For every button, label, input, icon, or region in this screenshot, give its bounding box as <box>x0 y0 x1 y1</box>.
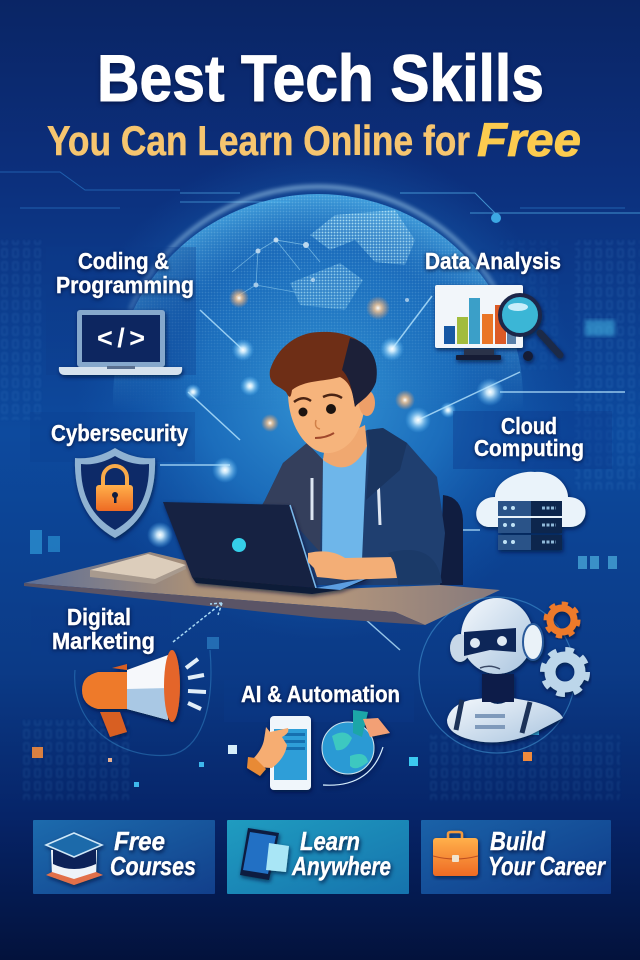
card: learn anywhere: Learn <box>300 826 360 856</box>
panel: ai and automation <box>224 680 414 790</box>
icon: megaphone <box>82 650 180 737</box>
chair <box>440 495 463 585</box>
card: free courses: Courses <box>110 851 196 881</box>
card: free courses: Free <box>114 826 165 856</box>
card: learn anywhere: Anywhere <box>291 851 391 881</box>
head and face <box>288 362 366 453</box>
t-shirt <box>322 445 367 560</box>
title: Free <box>477 113 581 166</box>
arc around megaphone <box>75 650 211 755</box>
panel: robot <box>419 597 587 753</box>
card: free courses <box>33 820 215 894</box>
card: learn anywhere <box>227 820 409 894</box>
network lines and glowing nodes <box>147 288 625 650</box>
title <box>47 41 581 166</box>
panel: coding and programming: Coding & <box>78 248 169 274</box>
icon: phone and tablet <box>240 828 289 880</box>
icon: cloud with server stack <box>476 472 586 550</box>
icon: sound lines <box>186 659 206 709</box>
globe <box>114 182 522 396</box>
panel: cloud computing: Computing <box>474 435 584 461</box>
icon: globe with flags <box>322 710 390 785</box>
icon: orange gear <box>546 604 578 636</box>
neck <box>323 425 367 467</box>
icon: monitor bar chart with magnifier <box>435 285 560 361</box>
panel: ai and automation: AI & Automation <box>241 681 400 707</box>
arrow to laptop <box>173 603 222 642</box>
icon: white gear <box>543 650 587 694</box>
jacket left side <box>262 443 323 552</box>
panel: cybersecurity <box>30 412 195 538</box>
panel: digital marketing <box>31 604 211 755</box>
card: build your career <box>421 820 611 894</box>
panel: cybersecurity: Cybersecurity <box>51 420 188 446</box>
panel: data analysis <box>425 248 561 361</box>
icon: shield with padlock <box>75 448 155 538</box>
panel: cloud computing <box>453 411 612 550</box>
hood collar <box>366 428 407 500</box>
hands and forearm <box>308 550 442 585</box>
icon: graduation cap on books <box>46 833 103 885</box>
panel: digital marketing: Marketing <box>52 628 155 654</box>
panel: data analysis: Data Analysis <box>425 248 561 274</box>
hoodie <box>265 428 445 585</box>
eyes and brows <box>294 395 342 438</box>
hair <box>270 332 376 407</box>
desk <box>24 552 500 625</box>
card: build your career: Your Career <box>488 851 606 881</box>
panel: coding and programming: Programming <box>56 272 194 298</box>
laptop <box>163 502 372 594</box>
icon: phone with pointing hand <box>247 716 311 790</box>
icon: laptop with code: </> <box>97 323 145 353</box>
hoodie strings <box>312 476 380 525</box>
icon: laptop with code <box>59 310 182 375</box>
notebook <box>90 554 186 584</box>
panel: cloud computing: Cloud <box>501 413 557 439</box>
panel: coding and programming <box>46 247 196 375</box>
panel: digital marketing: Digital <box>67 604 131 630</box>
card: build your career: Build <box>490 826 546 856</box>
title: You Can Learn Online for <box>47 117 470 164</box>
person <box>262 332 445 585</box>
ear <box>359 390 375 416</box>
icon: briefcase <box>433 832 478 876</box>
title: Best Tech Skills <box>97 41 544 115</box>
icon: robot body <box>447 598 563 742</box>
